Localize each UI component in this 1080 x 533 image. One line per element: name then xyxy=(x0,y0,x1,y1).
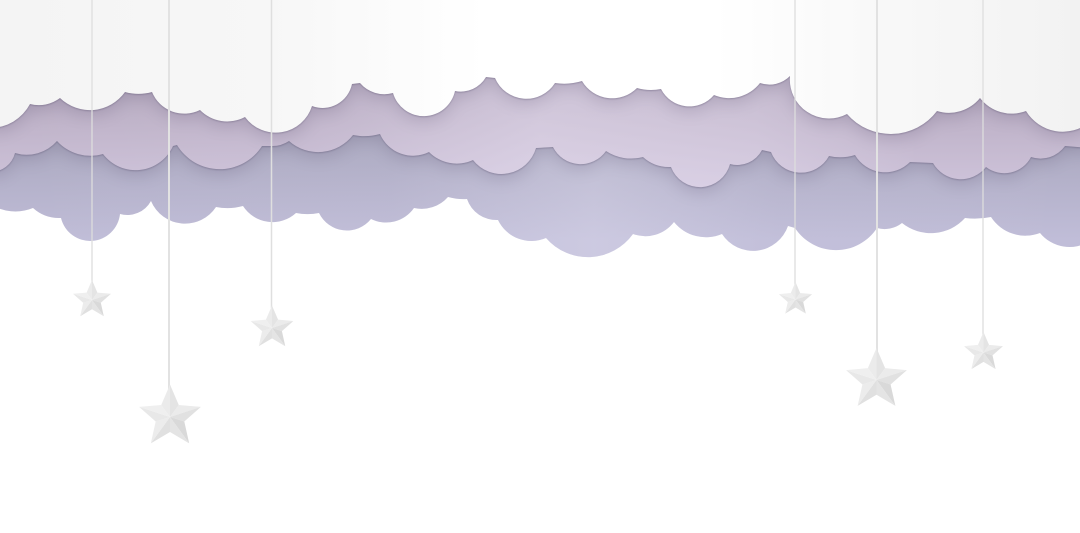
hanging star 1 xyxy=(73,0,111,316)
front white cloud layer xyxy=(0,0,1080,134)
hanging star 3 xyxy=(251,0,293,346)
hanging star 4 xyxy=(779,0,812,314)
back cloud layer xyxy=(0,0,1080,257)
middle cloud layer xyxy=(0,76,1080,194)
hanging star 2 xyxy=(139,0,201,443)
hanging star 5 xyxy=(846,0,907,406)
hanging star 6 xyxy=(964,0,1003,369)
